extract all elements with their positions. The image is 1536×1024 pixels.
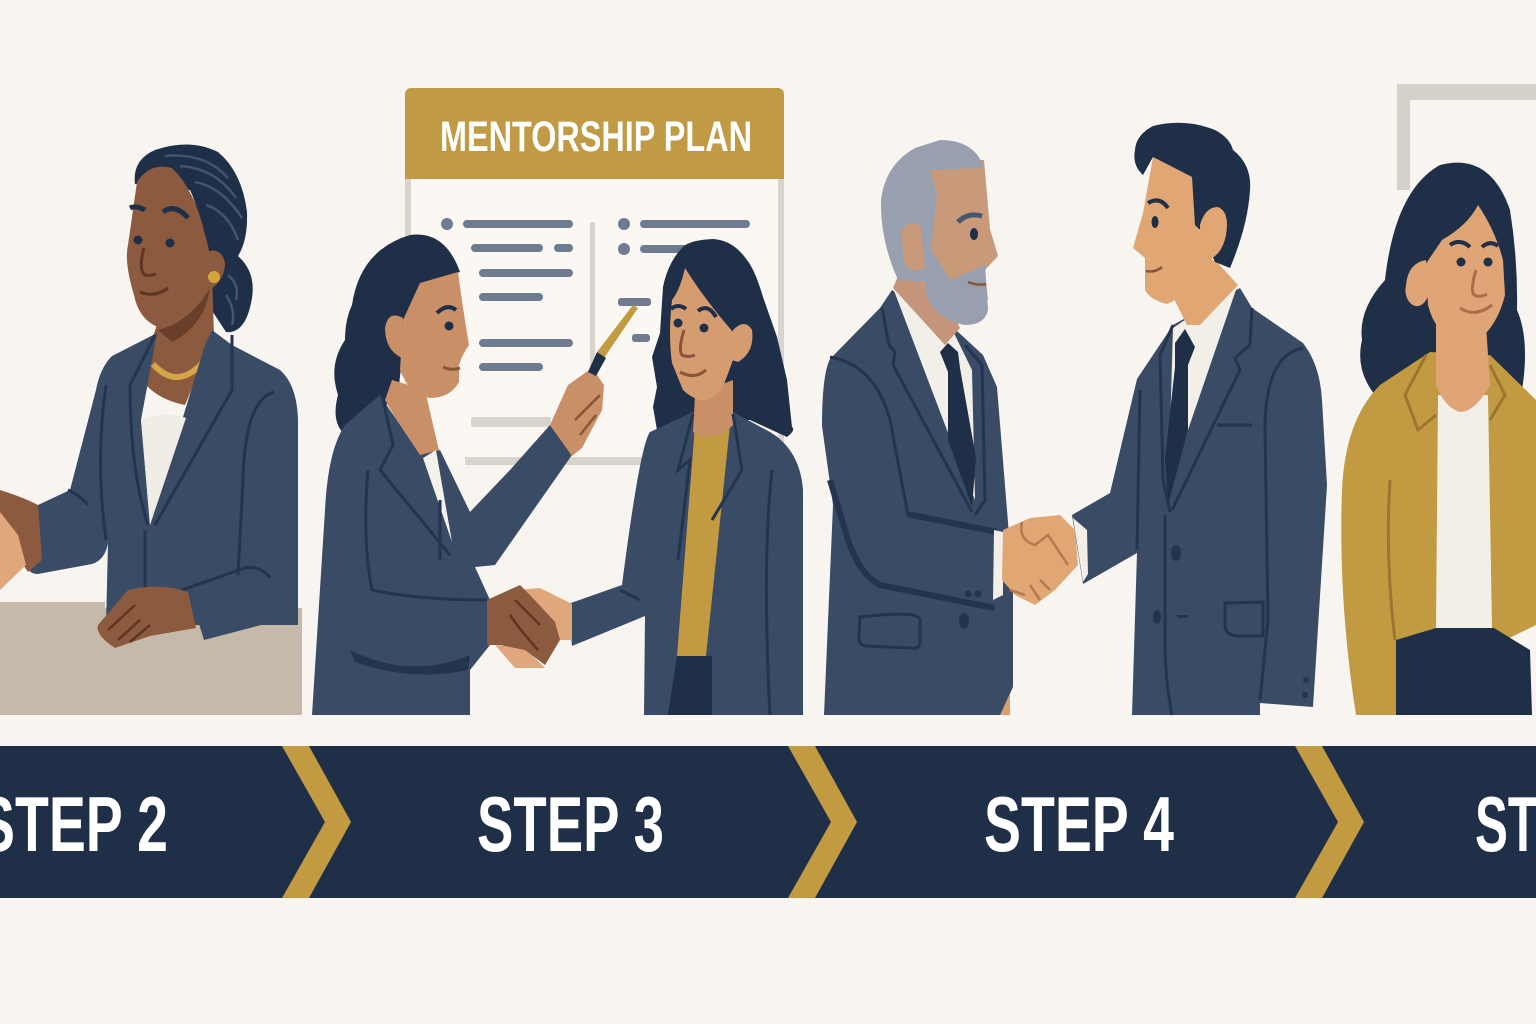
handshake — [1002, 515, 1078, 605]
blazer — [28, 330, 298, 625]
board header — [405, 88, 784, 179]
board header: MENTORSHIP PLAN — [440, 113, 752, 161]
white top — [1436, 395, 1492, 628]
step 3 label: STEP 3 — [477, 780, 664, 868]
face — [1425, 205, 1505, 348]
neck — [1172, 260, 1238, 325]
chevron 4 — [1295, 746, 1364, 898]
hair — [652, 239, 793, 437]
face — [127, 167, 211, 330]
hair — [334, 234, 460, 437]
tie — [940, 343, 976, 507]
hair — [1134, 123, 1250, 268]
panel: mentorship plan board — [405, 88, 784, 465]
gold top — [677, 425, 730, 656]
handshake — [487, 585, 572, 668]
leg — [1000, 685, 1010, 715]
neck and chest — [146, 275, 214, 405]
blazer — [568, 412, 803, 715]
figure: young mentee in suit — [1002, 123, 1327, 715]
chevron 3 — [788, 746, 857, 898]
figure: woman pointing at board — [312, 234, 638, 715]
ear — [1200, 207, 1227, 260]
blazer — [312, 395, 572, 715]
neck — [693, 380, 733, 437]
shaking hands — [0, 490, 42, 572]
hand on counter — [98, 586, 196, 648]
chevron 2 — [282, 746, 351, 898]
beard — [925, 240, 988, 325]
figure: woman in gold jacket — [1341, 163, 1536, 715]
face — [400, 272, 469, 398]
neck — [893, 268, 960, 345]
head — [915, 160, 998, 310]
face — [670, 268, 733, 400]
blazer — [822, 290, 1013, 715]
hair — [135, 144, 253, 332]
figure: mentor with braided hair — [0, 144, 298, 648]
face — [1133, 157, 1215, 304]
blazer — [1072, 288, 1327, 715]
wall frame at right — [1397, 84, 1536, 190]
ear — [385, 316, 403, 358]
figure: mentee with gold top — [487, 239, 803, 715]
sleeve — [833, 470, 997, 600]
gold jacket — [1341, 352, 1536, 715]
tie — [1165, 329, 1195, 505]
pointing hand — [550, 368, 604, 456]
shirt — [893, 288, 975, 500]
counter — [0, 602, 302, 715]
pointer — [597, 305, 638, 358]
step 4 label: STEP 4 — [984, 780, 1174, 868]
neck — [1436, 325, 1490, 412]
hair — [1360, 163, 1525, 395]
figure: senior mentor with grey beard — [822, 140, 1013, 715]
step banner — [0, 746, 1536, 898]
shirt — [1168, 284, 1238, 500]
trousers — [1396, 628, 1532, 715]
grey hair — [881, 140, 984, 282]
board list lines — [441, 218, 750, 371]
neck — [385, 380, 440, 460]
